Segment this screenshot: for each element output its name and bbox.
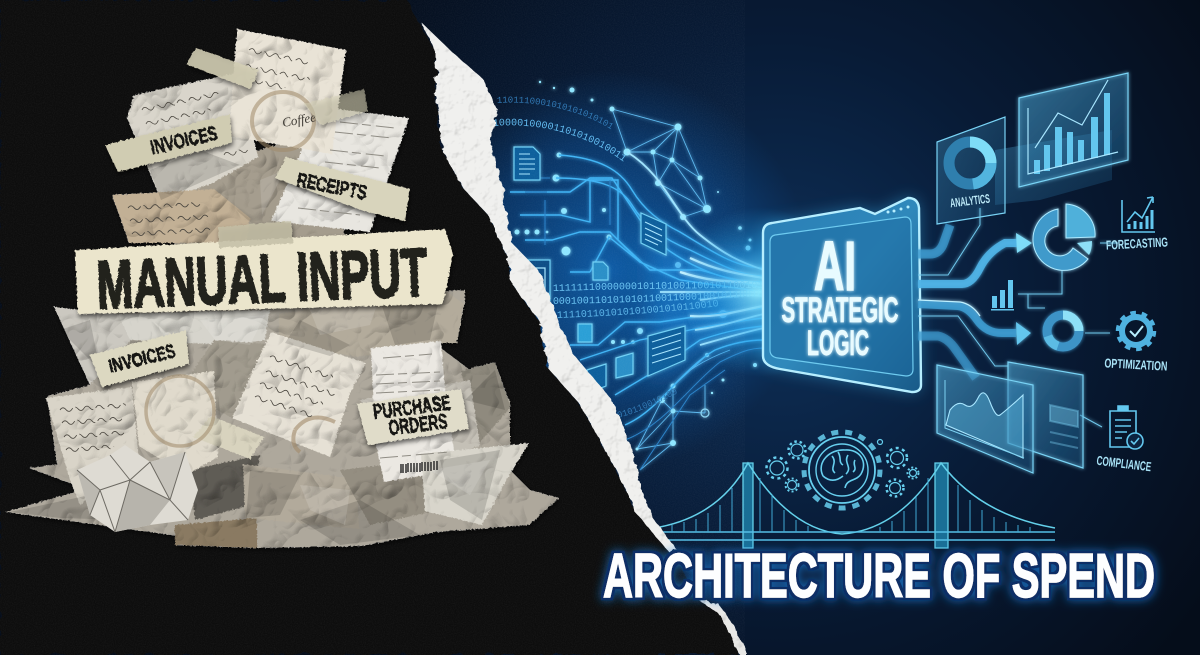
trend line and axes [1028, 80, 1118, 174]
receipt lines [298, 122, 450, 458]
orders: ORDERS [387, 410, 449, 440]
binary line 6: 0101100101001 [618, 388, 676, 418]
deck [660, 532, 1055, 540]
arrow to forecasting [918, 233, 1032, 284]
panel: dark paper side [0, 0, 745, 655]
panel: analytics card [937, 117, 1005, 224]
network nodes [514, 81, 757, 470]
circuit traces [510, 152, 764, 470]
band to analytics [918, 225, 950, 254]
icon: optimization gear [1118, 313, 1154, 349]
stream glow band [650, 225, 766, 385]
brain [821, 450, 864, 488]
icon: analytics donut [949, 142, 991, 184]
panel: glass bar chart [995, 73, 1128, 205]
barcode [401, 461, 437, 473]
bars [1034, 93, 1110, 174]
torn white strip: upper [420, 21, 676, 551]
cables [660, 463, 1055, 534]
analytics card body [937, 117, 1005, 224]
binary line 1: 1101110001010101010101 [497, 96, 612, 130]
icon: brain in gear [766, 432, 918, 508]
label: invoices (lower): INVOICES [107, 341, 178, 378]
panel: area chart pane [937, 365, 1078, 473]
chart: optimization donut [1047, 315, 1079, 347]
glass chart pane [1019, 73, 1128, 187]
label: analytics: ANALYTICS [949, 192, 991, 210]
heading: Logic: LOGIC [807, 324, 869, 363]
pane rows [1050, 405, 1078, 448]
label: invoices (lower) [90, 330, 189, 387]
binary line 4: 000100110101010110011000100101100101010110010110 [554, 290, 748, 304]
crumpled ball [77, 445, 198, 532]
rear glass pane [995, 130, 1112, 205]
label: manual input: MANUAL INPUT [95, 234, 429, 324]
towers [743, 463, 948, 548]
axes [945, 380, 1024, 458]
panel: data circuit streams flowing into AI [494, 78, 762, 472]
panel: paper pile [5, 29, 559, 548]
torn white strip: lower [699, 600, 748, 655]
label: invoices (top) [105, 114, 232, 172]
coffee stains [146, 92, 335, 452]
label: manual input [75, 221, 453, 324]
arrows: flow bands out of AI [918, 208, 1118, 427]
heading: AI: AI [814, 227, 856, 305]
thin connectors [918, 208, 1118, 427]
handwriting scribbles [60, 48, 335, 452]
dark paper sheet [0, 0, 745, 655]
purchase: PURCHASE [372, 392, 452, 424]
label: receipts: RECEIPTS [295, 169, 369, 205]
hangers [672, 478, 1030, 532]
panel outer glow [763, 198, 921, 392]
heading: Strategic: STRATEGIC [782, 291, 898, 330]
label: optimization: OPTIMIZATION [1104, 355, 1168, 374]
panel: rear compliance pane [1008, 362, 1083, 468]
panel window dots [886, 206, 910, 214]
binary line 3: 111111100000001011010011001011001010110100101100 [554, 281, 761, 291]
main gear [809, 437, 875, 503]
band to charts [918, 336, 976, 378]
label: receipts [275, 157, 410, 221]
chart: forecasting pie [1033, 204, 1095, 270]
handwritten note word: Coffee [281, 109, 317, 130]
chart: mini bars [991, 280, 1014, 310]
label: purchase orders [357, 389, 469, 445]
binary line 5: 11110110101010100101011001010110 [558, 300, 718, 318]
label: compliance: COMPLIANCE [1096, 453, 1152, 474]
panel inner frame [770, 217, 913, 376]
icons: floating documents [514, 147, 685, 392]
circuit glow [430, 60, 830, 480]
area chart [946, 393, 1023, 458]
graphic: suspension bridge [660, 463, 1055, 548]
panel body [763, 198, 921, 392]
beam glow at AI core [685, 192, 835, 392]
icon: compliance clipboard [1110, 406, 1143, 449]
paper grain [0, 0, 745, 655]
arrow to optimization [918, 300, 1031, 345]
fold facets [10, 150, 505, 545]
binary streams [494, 96, 761, 418]
label: forecasting: FORECASTING [1106, 234, 1168, 253]
area chart glass [937, 365, 1033, 473]
label: invoices (top): INVOICES [148, 123, 220, 159]
tape strips [186, 48, 368, 125]
panel: AI Strategic Logic [763, 198, 921, 392]
small gears [766, 440, 918, 496]
crumpled paper mass [5, 29, 559, 548]
icon: forecasting chart [1122, 197, 1155, 232]
